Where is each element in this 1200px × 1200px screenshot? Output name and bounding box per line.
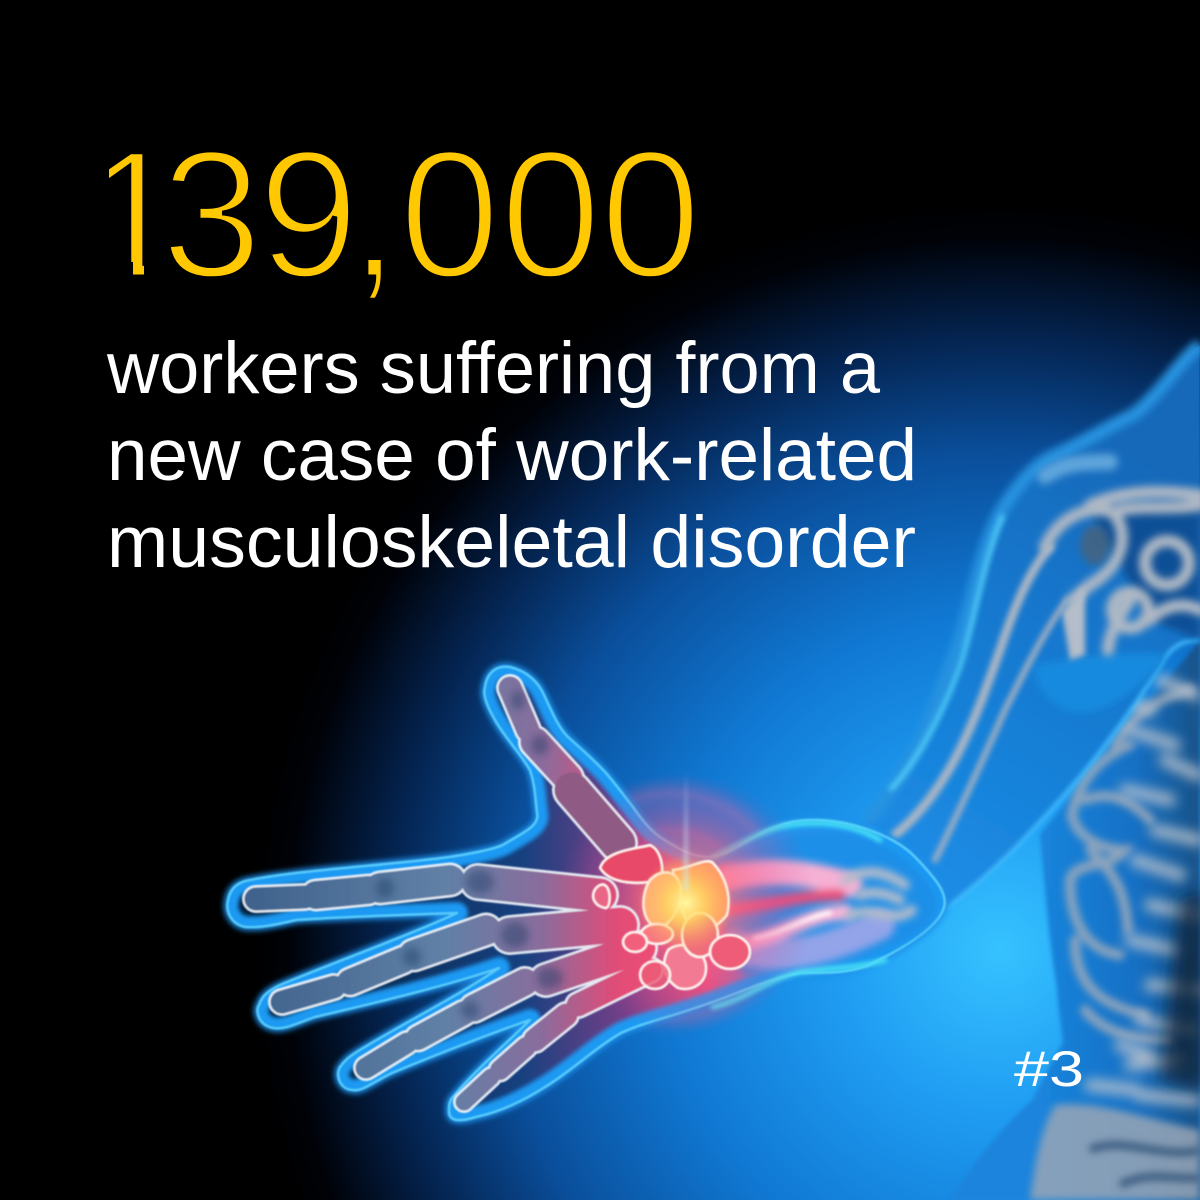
description text: musculoskeletal disorder	[107, 502, 916, 583]
description text: workers suffering from a	[106, 328, 880, 409]
bright glow core	[638, 855, 734, 951]
wrist carpal bones	[593, 845, 750, 989]
forearm end ellipse	[721, 830, 936, 975]
description text	[106, 328, 917, 583]
spine shadow	[1160, 890, 1200, 1090]
finger bones	[256, 688, 650, 1102]
glenoid wedge	[1062, 585, 1085, 660]
clavicle highlight	[1045, 462, 1110, 476]
elbow bones	[845, 872, 912, 916]
humerus bone	[895, 547, 1050, 835]
forearm bones pink	[725, 872, 880, 954]
hand bright rim	[227, 667, 945, 1120]
pelvis	[1030, 1104, 1200, 1200]
shoulder shadow	[1090, 500, 1200, 640]
humerus head shadow	[1080, 525, 1110, 565]
hand fill	[227, 667, 945, 1120]
pain halo rings	[545, 780, 795, 1030]
description text: new case of work-related	[107, 415, 917, 496]
hand	[227, 667, 945, 1120]
title number: 139,000	[83, 112, 701, 316]
rib highlights	[1090, 680, 1200, 1100]
ulna highlight	[755, 913, 830, 938]
upper arm and shoulder	[867, 345, 1200, 910]
pain glow	[556, 773, 816, 1033]
forearm cyan rims	[713, 823, 885, 1007]
hand outer glow	[227, 667, 945, 1120]
shoulder bones	[1045, 492, 1200, 650]
lens flare	[683, 770, 689, 890]
bone joint shadows	[376, 690, 563, 1019]
hand inner rim glow	[227, 667, 945, 1120]
armpit fold	[1033, 653, 1167, 712]
slide number: #3	[1014, 1041, 1084, 1097]
torso with ribcage	[950, 640, 1200, 1200]
arm outer band	[867, 345, 1200, 823]
